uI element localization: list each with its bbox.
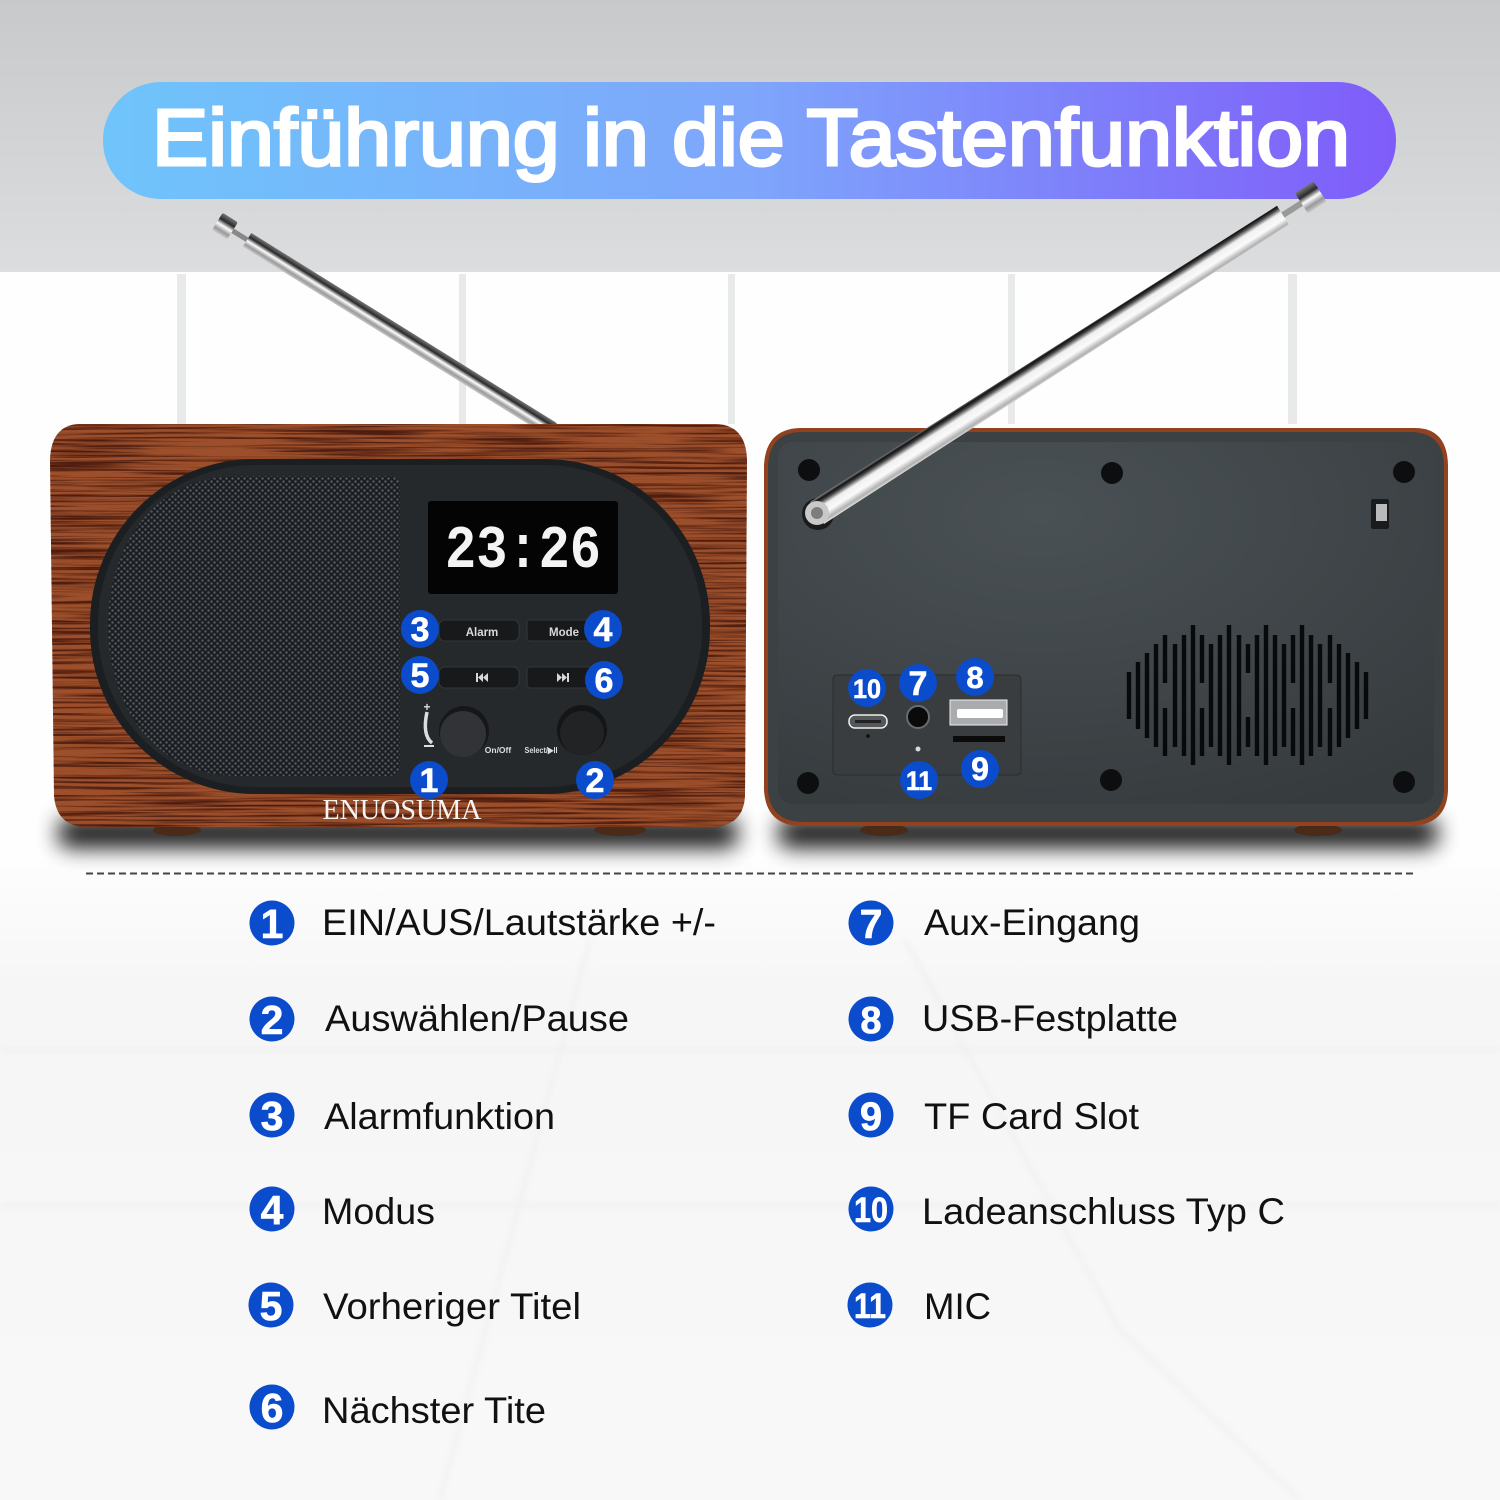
item 3: 3 [261, 1093, 283, 1139]
item 5 [248, 1282, 581, 1329]
badge 2 [576, 761, 614, 800]
badge 8 [956, 658, 994, 696]
title banner [103, 82, 1396, 199]
TF slot [953, 736, 1005, 742]
buttons [439, 620, 597, 688]
item 1: EIN/AUS/Lautstärke +/- [322, 902, 716, 943]
badge 3 [401, 610, 439, 649]
rear panel [768, 432, 1444, 822]
item 2: Auswählen/Pause [325, 998, 629, 1039]
item 8 [848, 996, 1178, 1042]
wooden case [50, 424, 747, 836]
item 11: 11 [854, 1287, 886, 1326]
rear case [764, 428, 1448, 836]
antenna: front radio [212, 213, 558, 438]
badge 9: 9 [971, 751, 989, 787]
item 5: 5 [260, 1283, 282, 1329]
port panel [833, 675, 1021, 775]
badge 11: 11 [906, 766, 932, 796]
badge 1 [410, 761, 448, 800]
badge 7 [899, 664, 937, 703]
item 2: 2 [261, 997, 283, 1043]
badge 5: 5 [411, 657, 429, 695]
badge 9 [961, 750, 999, 788]
item 1: 1 [261, 901, 283, 947]
item 7: Aux-Eingang [924, 902, 1140, 943]
item 5: Vorheriger Titel [323, 1286, 581, 1327]
badge 8: 8 [966, 660, 984, 695]
badge 1: 1 [420, 762, 438, 800]
switch [1371, 499, 1389, 529]
rear radio [764, 180, 1448, 836]
screws [797, 459, 1415, 794]
shadows under radios [58, 818, 1438, 848]
item 6: 6 [261, 1385, 283, 1431]
dashed divider [86, 872, 1414, 874]
buttons: Alarm [466, 627, 498, 639]
badge 6 [585, 661, 623, 700]
front radio [50, 424, 747, 836]
item 7: 7 [860, 901, 882, 947]
display [428, 501, 618, 594]
item 9: 9 [860, 1095, 882, 1139]
badge 3: 3 [411, 611, 429, 649]
speaker grille [108, 476, 400, 776]
item 10: Ladeanschluss Typ C [922, 1191, 1285, 1232]
item 3: Alarmfunktion [324, 1096, 555, 1137]
badge 6: 6 [595, 662, 613, 700]
buttons: Mode [549, 627, 579, 639]
item 11: MIC [924, 1286, 991, 1327]
USB-A port [950, 700, 1007, 725]
item 9 [848, 1092, 1140, 1139]
badge 5 [401, 656, 439, 695]
item 2 [250, 996, 629, 1043]
item 9: TF Card Slot [924, 1096, 1140, 1137]
badge 2: 2 [586, 762, 604, 800]
badge 10 [848, 669, 886, 707]
knobs [423, 700, 607, 757]
brand: ENUOSUMA [322, 795, 482, 826]
badge 7: 7 [909, 665, 927, 703]
control panel [90, 459, 710, 794]
item 11 [848, 1282, 991, 1328]
knobs: Select/▶II [524, 745, 558, 755]
knobs: + [423, 700, 431, 714]
badge 4: 4 [594, 611, 613, 649]
item 4: 4 [261, 1187, 284, 1233]
antenna: rear radio [802, 180, 1327, 530]
item 4: Modus [322, 1191, 435, 1232]
speaker vents [1129, 625, 1366, 765]
item 8: 8 [860, 1000, 882, 1042]
item 7 [848, 900, 1140, 947]
badge 4 [584, 610, 622, 649]
knobs: On/Off [485, 745, 511, 755]
USB-C port [849, 715, 887, 738]
item 4 [250, 1186, 435, 1233]
item 10: 10 [854, 1191, 888, 1230]
legend right [848, 900, 1285, 1328]
item 8: USB-Festplatte [922, 998, 1178, 1039]
mic [916, 746, 920, 752]
aux jack [907, 706, 929, 728]
badge 11 [900, 761, 938, 799]
item 6 [250, 1384, 546, 1431]
item 6: Nächster Tite [322, 1390, 546, 1431]
display: 23:26 [445, 518, 601, 586]
legend left [248, 900, 716, 1431]
title: Einführung in die Tastenfunktion [152, 93, 1350, 182]
item 3 [250, 1092, 555, 1139]
badge 10: 10 [853, 674, 881, 704]
